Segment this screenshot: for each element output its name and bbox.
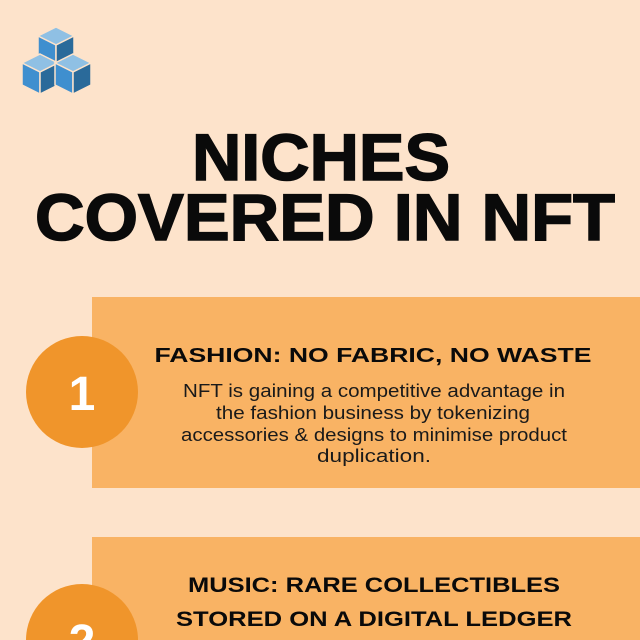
heading: music [176,574,572,631]
text block: fashion description: the fashion business by tokenizing [216,402,530,423]
title: NICHES [192,120,450,194]
text block: fashion description: NFT is gaining a competitive advantage in [183,380,565,401]
text block: fashion description: duplication. [317,445,431,466]
panel: music [26,537,640,640]
heading: music: STORED ON A DIGITAL LEDGER [176,608,572,631]
icon: number 1 circle [26,336,138,448]
icon: number 2 circle [26,584,138,640]
title [35,120,615,254]
icon: logo cubes [22,27,91,94]
text block: fashion description [181,380,567,466]
panel: fashion [26,297,640,488]
title: COVERED IN NFT [35,180,615,254]
heading: fashion: FASHION: NO FABRIC, NO WASTE [154,345,592,367]
heading: music: MUSIC: RARE COLLECTIBLES [188,574,560,597]
text block: fashion description: accessories & designs to minimise product [181,424,567,445]
icon: number 1 circle: 1 [69,368,95,421]
